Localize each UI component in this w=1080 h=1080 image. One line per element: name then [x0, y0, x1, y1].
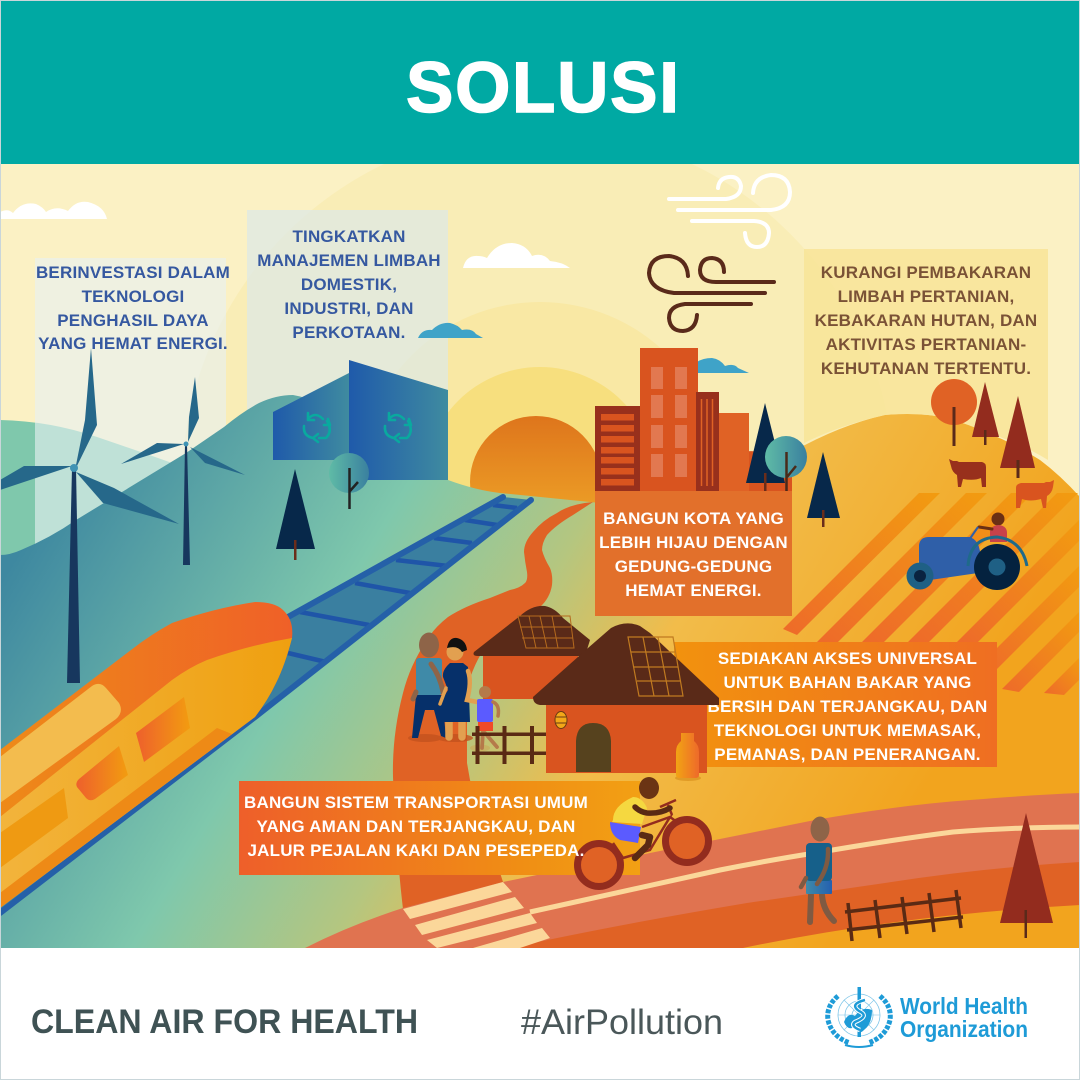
- house: back: [474, 606, 590, 699]
- tree: red pine: [1000, 396, 1035, 478]
- callout: clean fuels: SEDIAKAN AKSES UNIVERSAL: [718, 649, 977, 668]
- tree: orange round: [931, 379, 977, 446]
- light green hill: [0, 420, 200, 560]
- ground shadows: [408, 734, 490, 752]
- callout text: public transport: [244, 793, 588, 860]
- logo emblem: [828, 987, 890, 1047]
- cow: red: [949, 459, 986, 487]
- cloud: white centre: [463, 243, 570, 268]
- train bottom stripe: [0, 728, 232, 908]
- icon: recycling left: [304, 413, 330, 442]
- cyclist: [578, 777, 708, 886]
- rails: [0, 497, 531, 913]
- building: tall: [640, 348, 698, 491]
- train: [0, 602, 292, 908]
- text: agricultural burning: KURANGI PEMBAKARAN: [821, 263, 1031, 282]
- door: [576, 723, 611, 772]
- building: narrow: [696, 392, 719, 491]
- sun halos: [182, 129, 894, 841]
- gas cylinder: [675, 733, 701, 781]
- low hill behind city: [719, 451, 792, 491]
- cow: orange: [1016, 480, 1054, 508]
- crosswalk stripes: [403, 882, 550, 948]
- bicycle: [578, 800, 708, 886]
- callout: clean fuels: UNTUK BAHAN BAKAR YANG: [723, 673, 972, 692]
- tree: navy pine: [276, 469, 315, 560]
- text: energy technology: [36, 263, 230, 353]
- recycling building: [273, 360, 448, 480]
- solar panel: front house: [628, 637, 683, 696]
- city: [595, 348, 807, 491]
- callout: greener cities: BANGUN KOTA YANG: [603, 509, 784, 528]
- text: energy technology: BERINVESTASI DALAM: [36, 263, 230, 282]
- logo wordmark: World Health: [900, 993, 1028, 1019]
- sleepers: [288, 505, 517, 662]
- footer band: [0, 948, 1080, 1080]
- road: salmon lane: [305, 793, 1080, 948]
- footer slogan: CLEAN AIR FOR HEALTH: [31, 1003, 418, 1041]
- logo: World Health Organization: [828, 987, 1028, 1047]
- road: cream line: [530, 827, 1080, 912]
- panel: energy technology backdrop: [35, 258, 226, 548]
- callout: clean fuels: PEMANAS, DAN PENERANGAN.: [714, 745, 981, 764]
- callout: greener cities: HEMAT ENERGI.: [625, 581, 762, 600]
- family: [408, 632, 498, 752]
- text: agricultural burning: KEBAKARAN HUTAN, DAN: [815, 311, 1037, 330]
- train windows: [0, 697, 190, 868]
- title: SOLUSI: [406, 49, 679, 128]
- wind turbine: small: [121, 377, 245, 565]
- callout: clean fuels: TEKNOLOGI UNTUK MEMASAK,: [714, 721, 981, 740]
- text: agricultural burning: [815, 263, 1037, 378]
- tree: red pine small: [972, 382, 999, 445]
- text: agricultural burning: KEHUTANAN TERTENTU.: [821, 359, 1031, 378]
- woman: [440, 638, 477, 737]
- text: waste management: PERKOTAAN.: [292, 323, 406, 342]
- yard fence: [472, 726, 546, 764]
- land with hill: [0, 395, 800, 948]
- tree: large red pine: [1000, 813, 1053, 938]
- panel: agricultural burning backdrop: [804, 249, 1048, 460]
- cloud: white top left: [0, 202, 107, 219]
- tractor front wheel: [906, 562, 934, 590]
- callout: clean fuels: BERSIH DAN TERJANGKAU, DAN: [707, 697, 988, 716]
- walking person: [801, 816, 834, 922]
- panel: waste management backdrop: [247, 210, 448, 470]
- text: waste management: [257, 227, 441, 342]
- tree: round teal: [329, 453, 369, 509]
- window: [555, 712, 567, 728]
- callout: clean fuels: [674, 642, 997, 767]
- track bed: [0, 497, 531, 913]
- logo wordmark: Organization: [900, 1016, 1028, 1042]
- child: [477, 686, 498, 748]
- tractor with farmer: [906, 512, 1027, 590]
- text: agricultural burning: LIMBAH PERTANIAN,: [838, 287, 1014, 306]
- text: agricultural burning: AKTIVITAS PERTANIAN-: [826, 335, 1026, 354]
- callout text: public transport: YANG AMAN DAN TERJANGKAU, DAN: [256, 817, 576, 836]
- fence: [845, 890, 963, 941]
- text: waste management: TINGKATKAN: [292, 227, 406, 246]
- man: [412, 632, 446, 738]
- icon: recycling right: [385, 413, 411, 442]
- cloud: blue behind city: [697, 358, 749, 373]
- callout text: public transport: JALUR PEJALAN KAKI DAN PESEPEDA.: [247, 841, 585, 860]
- callout: greener cities: LEBIH HIJAU DENGAN: [599, 533, 788, 552]
- icon: white wind: [669, 175, 790, 247]
- building: right: [719, 413, 749, 491]
- text: energy technology: YANG HEMAT ENERGI.: [38, 334, 228, 353]
- building: left with slats: [595, 406, 640, 491]
- farm field stripes: [783, 493, 1080, 695]
- golden farm hill: [482, 414, 1080, 948]
- footer hashtag: #AirPollution: [521, 1003, 723, 1042]
- callout: greener cities: [595, 491, 792, 616]
- sun: [470, 416, 602, 548]
- train body: [0, 602, 292, 908]
- background sky: [0, 164, 1080, 948]
- solar panel: back house: [518, 616, 574, 648]
- text: waste management: INDUSTRI, DAN: [284, 299, 414, 318]
- cloud: blue near panel: [418, 323, 483, 338]
- railway track: [0, 497, 531, 913]
- rider: [610, 777, 670, 858]
- tree: city pine: [746, 403, 785, 491]
- callout text: public transport: BANGUN SISTEM TRANSPORTASI UMUM: [244, 793, 588, 812]
- header band: [0, 0, 1080, 164]
- text: energy technology: TEKNOLOGI: [82, 287, 184, 306]
- train lower panel: [0, 638, 292, 908]
- road: [305, 793, 1080, 948]
- text: waste management: MANAJEMEN LIMBAH: [257, 251, 441, 270]
- icon: brown wind: [649, 256, 774, 331]
- logo wordmark: [900, 993, 1028, 1042]
- tree: pine right of city: [807, 452, 840, 527]
- house: front: [533, 623, 719, 773]
- road: dark lane: [480, 850, 1080, 948]
- text: energy technology: PENGHASIL DAYA: [57, 311, 209, 330]
- wind turbine: large: [0, 348, 179, 683]
- farmer: [969, 512, 1007, 542]
- tractor body: [919, 537, 985, 580]
- tractor rear wheel: [968, 537, 1027, 590]
- train windscreen panel: [0, 684, 121, 803]
- tree: city round: [765, 436, 807, 491]
- winding orange path: [393, 502, 593, 909]
- callout box: public transport: [239, 781, 640, 875]
- callout: greener cities: GEDUNG-GEDUNG: [615, 557, 772, 576]
- text: waste management: DOMESTIK,: [301, 275, 397, 294]
